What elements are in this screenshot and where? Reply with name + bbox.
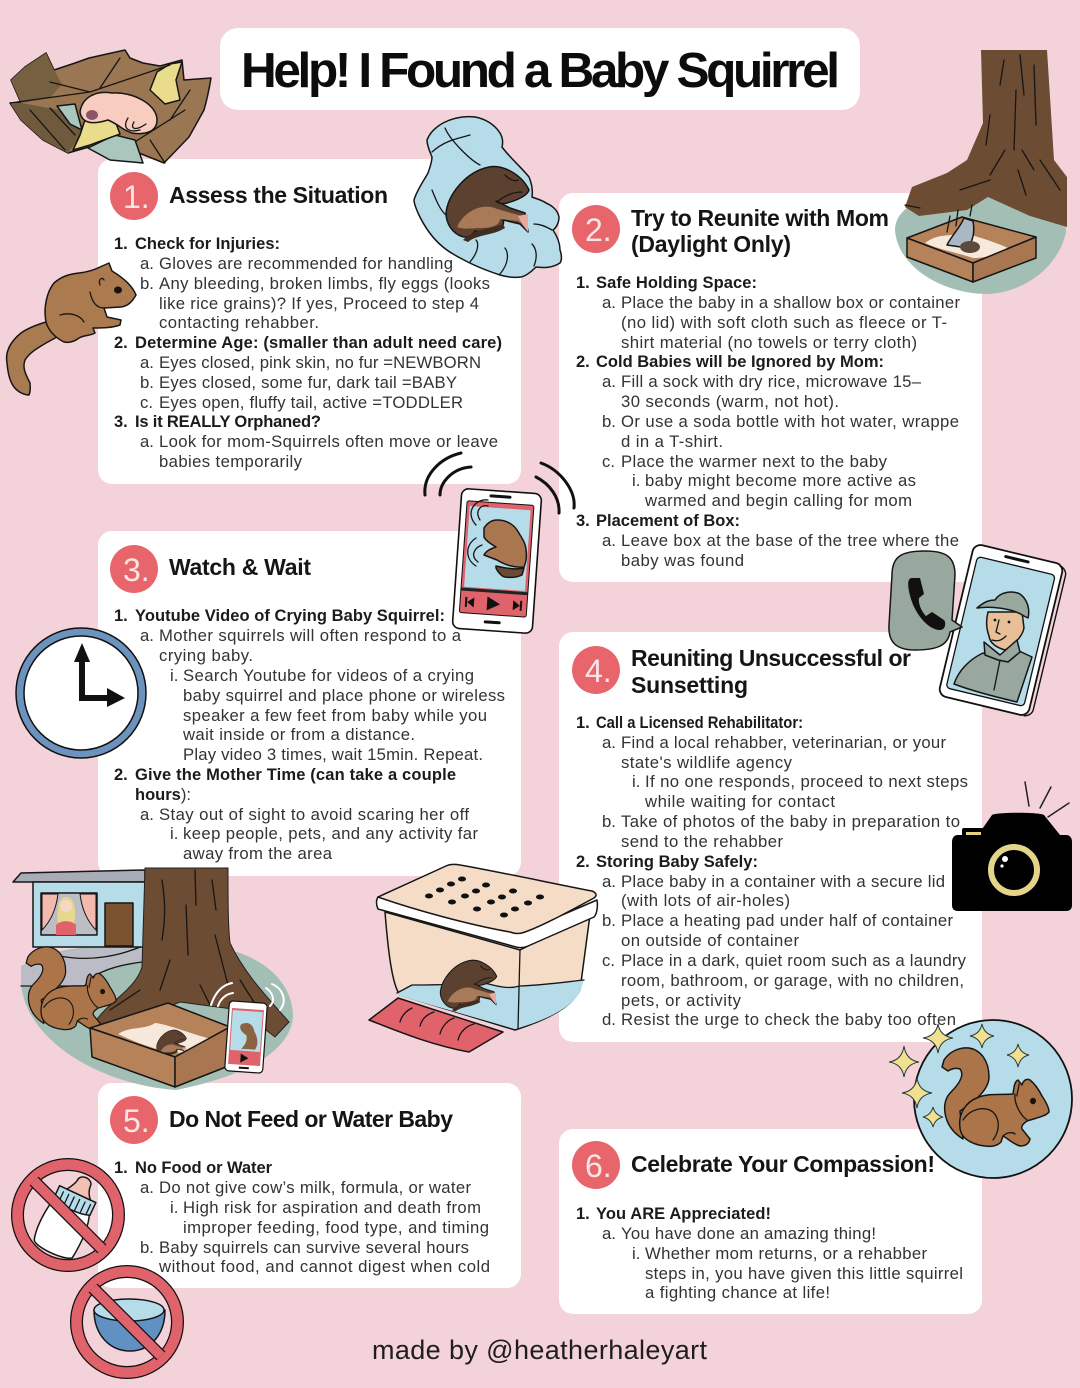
step 1 body text: b. <box>140 274 154 293</box>
icon: brown squirrel peeking <box>7 263 136 395</box>
step 4 body text: b. <box>602 812 616 831</box>
step 3 body text: speaker a few feet from baby while you <box>183 706 487 725</box>
icon: phone call with rehabilitator <box>889 543 1068 718</box>
step 2 body text: Fill a sock with dry rice, microwave 15– <box>621 372 922 391</box>
step 4 body text: room, bathroom, or garage, with no children, <box>621 971 964 990</box>
footer credit: made by @heatherhaleyart <box>372 1335 707 1365</box>
step 4 number badge <box>572 646 620 694</box>
step 3 body text: wait inside or from a distance. <box>182 725 415 744</box>
panel: step 1 assess the situation <box>98 159 521 484</box>
step 2 body text: shirt material (no towels or terry cloth) <box>621 333 917 352</box>
step 4 body text: Take of photos of the baby in preparation to <box>621 812 960 831</box>
step 4 body text: If no one responds, proceed to next steps <box>645 772 968 791</box>
icon: baby squirrel on leaves <box>10 50 211 163</box>
icon: clock <box>16 628 146 758</box>
step 2 body text: d in a T-shirt. <box>621 432 723 451</box>
step 2 body text: warmed and begin calling for mom <box>644 491 912 510</box>
step 3 body text: Youtube Video of Crying Baby Squirrel: <box>135 607 445 625</box>
step 1 body text: a. <box>140 353 154 372</box>
step 2 body text: baby was found <box>621 551 744 570</box>
step 1 body text: Gloves are recommended for handling <box>159 254 453 273</box>
step 2 body text: 30 seconds (warm, not hot). <box>621 392 839 411</box>
step 4 heading <box>631 645 911 698</box>
icon: tree scene with mother squirrel, box and phone <box>13 868 293 1090</box>
icon: ringing phone with crying squirrel video <box>425 453 574 634</box>
step 2 number badge: 2. <box>585 212 612 248</box>
step 5 number badge <box>110 1096 158 1144</box>
step 2 body text <box>576 274 960 570</box>
step 2 body text: 1. <box>576 274 590 292</box>
step 5 body text: No Food or Water <box>135 1159 273 1177</box>
step 3 body text: Play video 3 times, wait 15min. Repeat. <box>183 745 483 764</box>
step 2 body text: Place the baby in a shallow box or container <box>621 293 960 312</box>
step 5 body text: without food, and cannot digest when cold <box>158 1257 490 1276</box>
step 5 heading: Do Not Feed or Water Baby <box>169 1106 453 1132</box>
step 3 body text: Mother squirrels will often respond to a <box>159 626 462 645</box>
step 3 body text: baby squirrel and place phone or wireless <box>183 686 505 705</box>
step 2 body text: Leave box at the base of the tree where the <box>621 531 959 550</box>
step 2 body text: i. <box>632 471 640 490</box>
step 4 body text <box>576 714 968 1029</box>
step 6 body text: Whether mom returns, or a rehabber <box>645 1244 927 1263</box>
step 2 body text: baby might become more active as <box>645 471 916 490</box>
step 1 body text: 3. <box>114 413 128 431</box>
step 1 body text: 2. <box>114 334 128 352</box>
step 1 body text: like rice grains)? If yes, Proceed to step 4 <box>159 294 479 313</box>
step 2 body text: a. <box>602 531 616 550</box>
step 6 body text: a. <box>602 1224 616 1243</box>
step 1 body text: 1. <box>114 235 128 253</box>
step 4 body text: 2. <box>576 853 590 871</box>
step 1 body text: b. <box>140 373 154 392</box>
step 3 body text: i. <box>170 666 178 685</box>
step 4 number badge: 4. <box>585 653 612 689</box>
phone with man <box>938 543 1068 718</box>
step 4 body text: Call a Licensed Rehabilitator: <box>596 714 803 732</box>
step 4 body text: (with lots of air-holes) <box>621 891 790 910</box>
step 6 body text: 1. <box>576 1205 590 1223</box>
step 2 body text: (no lid) with soft cloth such as fleece or T- <box>621 313 947 332</box>
step 1 body text: a. <box>140 432 154 451</box>
icon: gloved hand holding baby squirrel <box>414 117 562 277</box>
step 4 heading: Reuniting Unsuccessful or <box>631 645 911 671</box>
step 2 body text: Or use a soda bottle with hot water, wrappe <box>621 412 959 431</box>
step 2 body text: a. <box>602 372 616 391</box>
title: Help! I Found a Baby Squirrel <box>241 43 840 98</box>
icon: air-hole container with heating pad <box>369 864 597 1052</box>
step 3 heading: Watch & Wait <box>169 554 311 580</box>
step 4 body text: state's wildlife agency <box>621 753 793 772</box>
step 5 body text: improper feeding, food type, and timing <box>183 1218 489 1237</box>
title <box>220 28 860 110</box>
step 3 body text: 1. <box>114 607 128 625</box>
step 1 body text: a. <box>140 254 154 273</box>
step 1 body text: Eyes closed, pink skin, no fur =NEWBORN <box>159 353 481 372</box>
step 3 body text: keep people, pets, and any activity far <box>183 824 478 843</box>
step 4 body text: Find a local rehabber, veterinarian, or your <box>621 733 946 752</box>
step 4 body text: Place a heating pad under half of container <box>621 911 953 930</box>
step 1 body text: babies temporarily <box>159 452 303 471</box>
step 1 body text: c. <box>140 393 153 412</box>
step 6 number badge: 6. <box>585 1148 612 1184</box>
step 2 body text: a. <box>602 293 616 312</box>
step 4 body text: i. <box>632 772 640 791</box>
step 3 body text: hours): <box>135 785 191 804</box>
step 5 body text: a. <box>140 1178 154 1197</box>
step 4 body text: d. <box>602 1010 616 1029</box>
step 2 body text: c. <box>602 452 615 471</box>
step 3 body text: 2. <box>114 766 128 784</box>
step 1 body text: Check for Injuries: <box>135 235 280 253</box>
sound waves <box>425 453 574 513</box>
step 1 number badge <box>110 172 158 220</box>
panel: step 2 reunite with mom <box>559 193 982 582</box>
step 2 heading: Try to Reunite with Mom <box>631 205 889 231</box>
step 2 body text: b. <box>602 412 616 431</box>
step 5 body text: 1. <box>114 1159 128 1177</box>
step 2 body text: 2. <box>576 353 590 371</box>
step 3 number badge <box>110 545 158 593</box>
step 2 heading: (Daylight Only) <box>631 231 791 257</box>
step 2 number badge <box>572 205 620 253</box>
step 3 body text: a. <box>140 805 154 824</box>
step 1 body text: Look for mom-Squirrels often move or leave <box>159 432 498 451</box>
step 6 body text: You have done an amazing thing! <box>621 1224 876 1243</box>
step 6 number badge <box>572 1141 620 1189</box>
step 4 body text: while waiting for contact <box>644 792 835 811</box>
speech bubble with handset <box>889 551 962 650</box>
step 1 body text: Any bleeding, broken limbs, fly eggs (looks <box>159 274 490 293</box>
step 4 body text: Place baby in a container with a secure lid <box>621 872 945 891</box>
step 4 body text: 1. <box>576 714 590 732</box>
step 5 number badge: 5. <box>123 1103 150 1139</box>
step 3 body text: crying baby. <box>159 646 253 665</box>
step 4 body text: b. <box>602 911 616 930</box>
panel: step 4 reuniting unsuccessful <box>559 632 982 1042</box>
step 4 body text: a. <box>602 733 616 752</box>
step 5 body text: Do not give cow’s milk, formula, or water <box>159 1178 471 1197</box>
step 1 body text: Is it REALLY Orphaned? <box>135 413 321 431</box>
icon: tree and box with warmer <box>895 50 1067 294</box>
icon: no water bowl <box>76 1272 178 1372</box>
step 3 body text <box>114 607 505 863</box>
step 5 body text <box>114 1159 490 1276</box>
step 2 body text: Place the warmer next to the baby <box>621 452 888 471</box>
step 4 body text: Storing Baby Safely: <box>596 853 758 871</box>
step 3 number badge: 3. <box>123 552 150 588</box>
panel: step 6 celebrate <box>559 1129 982 1314</box>
step 6 body text: steps in, you have given this little squirrel <box>645 1264 963 1283</box>
step 4 body text: on outside of container <box>621 931 799 950</box>
panel: step 5 do not feed <box>98 1083 521 1288</box>
step 5 body text: Baby squirrels can survive several hours <box>159 1238 469 1257</box>
step 4 body text: Resist the urge to check the baby too often <box>621 1010 956 1029</box>
step 3 body text: a. <box>140 626 154 645</box>
step 4 heading: Sunsetting <box>631 672 748 698</box>
step 5 body text: i. <box>170 1198 178 1217</box>
step 1 body text: Eyes closed, some fur, dark tail =BABY <box>159 373 457 392</box>
step 4 body text: pets, or activity <box>621 991 742 1010</box>
step 1 body text <box>114 235 502 471</box>
step 1 body text: contacting rehabber. <box>159 313 319 332</box>
icon: camera <box>952 782 1072 911</box>
step 6 body text: a fighting chance at life! <box>645 1283 830 1302</box>
step 1 heading: Assess the Situation <box>169 182 388 208</box>
step 3 body text: Search Youtube for videos of a crying <box>183 666 474 685</box>
step 4 body text: send to the rehabber <box>621 832 783 851</box>
step 4 body text: c. <box>602 951 615 970</box>
sparkles <box>889 1024 1029 1127</box>
step 6 heading: Celebrate Your Compassion! <box>631 1151 935 1177</box>
step 2 body text: 3. <box>576 512 590 530</box>
step 2 body text: Cold Babies will be Ignored by Mom: <box>596 353 884 371</box>
step 2 body text: Safe Holding Space: <box>596 274 757 292</box>
step 2 heading <box>631 205 889 257</box>
step 5 body text: High risk for aspiration and death from <box>183 1198 481 1217</box>
step 3 body text: Give the Mother Time (can take a couple <box>135 766 456 784</box>
step 2 body text: Placement of Box: <box>596 512 740 530</box>
step 1 body text: Determine Age: (smaller than adult need care) <box>135 334 502 352</box>
step 1 body text: Eyes open, fluffy tail, active =TODDLER <box>159 393 463 412</box>
icon: squirrel in circle with sparkles <box>889 1020 1072 1178</box>
step 6 body text <box>576 1205 963 1302</box>
step 6 body text: i. <box>632 1244 640 1263</box>
step 6 body text: You ARE Appreciated! <box>596 1205 771 1223</box>
step 3 body text: away from the area <box>183 844 333 863</box>
step 3 body text: i. <box>170 824 178 843</box>
step 3 body text: Stay out of sight to avoid scaring her off <box>159 805 469 824</box>
step 4 body text: a. <box>602 872 616 891</box>
icon: no baby bottle <box>18 1164 118 1266</box>
step 1 number badge: 1. <box>123 179 150 215</box>
step 4 body text: Place in a dark, quiet room such as a laundry <box>621 951 967 970</box>
step 5 body text: b. <box>140 1238 154 1257</box>
panel: step 3 watch and wait <box>98 531 521 876</box>
